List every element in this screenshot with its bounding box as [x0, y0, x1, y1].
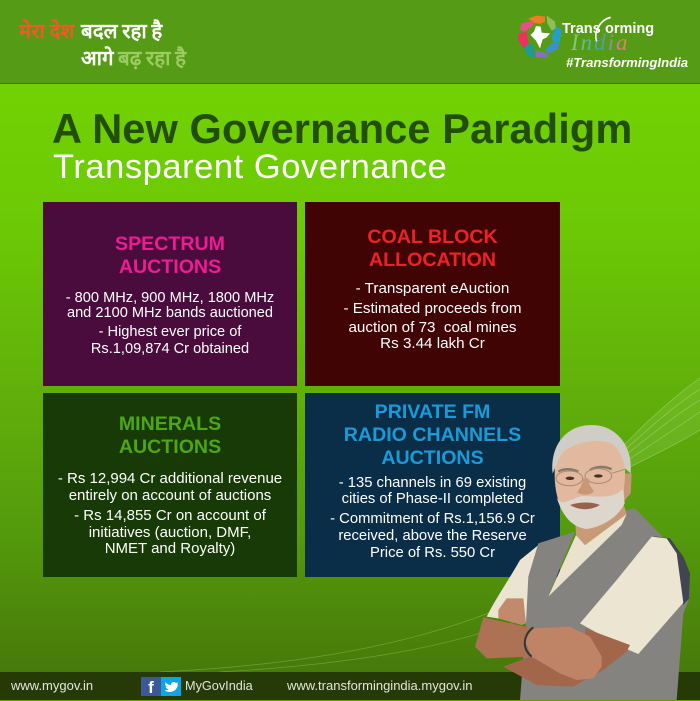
- panel: spectrum auctions: Rs.1,09,874 Cr obtained: [91, 341, 249, 357]
- panel: private fm radio channels auctions: - Commitment of Rs.1,156.9 Cr: [330, 511, 535, 527]
- panel: minerals auctions: entirely on account of auctions: [69, 487, 271, 504]
- icon: facebook: [141, 677, 161, 696]
- subtitle: Transparent Governance: [53, 148, 447, 186]
- panel: private fm radio channels auctions: Price of Rs. 550 Cr: [370, 545, 495, 561]
- transforming india logo: [518, 16, 688, 70]
- ear: [622, 473, 632, 502]
- logo hashtag: #TransformingIndia: [566, 55, 688, 70]
- hair: [552, 425, 631, 473]
- panel: minerals auctions: MINERALS: [119, 413, 221, 435]
- background swoosh lines: [160, 378, 700, 672]
- panel: coal block allocation: auction of 73 coal mines: [348, 319, 516, 336]
- hand highlight: [525, 627, 602, 680]
- illustration: man with crossed arms: [475, 425, 690, 700]
- hindi slogan: बढ़ रहा है: [118, 41, 186, 71]
- logo text: Trans: [562, 21, 601, 37]
- header band: [0, 0, 700, 84]
- panel: coal block allocation: [305, 202, 560, 386]
- hindi slogan: बदल रहा है: [81, 14, 162, 44]
- panel: spectrum auctions: - Highest ever price of: [99, 324, 241, 340]
- panel: coal block allocation: - Transparent eAuction: [356, 280, 509, 297]
- right sleeve: [580, 537, 683, 654]
- panel: private fm radio channels auctions: AUCTIONS: [381, 447, 484, 469]
- panel: coal block allocation: Rs 3.44 lakh Cr: [380, 335, 485, 352]
- panel: private fm radio channels auctions: PRIVATE FM: [375, 401, 490, 423]
- panel: minerals auctions: [43, 393, 297, 577]
- panel: private fm radio channels auctions: cities of Phase-II completed: [342, 491, 523, 507]
- panel: spectrum auctions: [43, 202, 297, 386]
- eyebrows: [558, 467, 612, 472]
- panel: minerals auctions: initiatives (auction, DMF,: [89, 524, 251, 541]
- panel: minerals auctions: AUCTIONS: [119, 436, 221, 458]
- mouth: [570, 502, 600, 509]
- left sleeve: [487, 542, 543, 623]
- wrist band: [525, 627, 533, 657]
- panel: private fm radio channels auctions: RADIO CHANNELS: [344, 424, 521, 446]
- logo wheel icon: [518, 16, 611, 58]
- panel: private fm radio channels auctions: - 135 channels in 69 existing: [339, 475, 526, 491]
- lower arm: [503, 628, 630, 687]
- beard: [557, 488, 625, 529]
- panel: minerals auctions: - Rs 12,994 Cr additional revenue: [58, 470, 282, 487]
- panel: coal block allocation: ALLOCATION: [369, 249, 496, 271]
- panel: private fm radio channels auctions: received, above the Reserve: [338, 528, 527, 544]
- footer band: [0, 672, 700, 700]
- upper arm and hand: [475, 617, 602, 680]
- panel: minerals auctions: NMET and Royalty): [105, 540, 235, 557]
- logo text second part: orming: [605, 21, 654, 37]
- panel: spectrum auctions: and 2100 MHz bands auctioned: [67, 305, 273, 321]
- panel: spectrum auctions: AUCTIONS: [119, 256, 221, 278]
- left fingers: [498, 598, 526, 625]
- panel: spectrum auctions: SPECTRUM: [115, 233, 225, 255]
- nose shadow: [577, 478, 594, 495]
- vest: [520, 508, 690, 700]
- title: A New Governance Paradigm: [52, 105, 632, 152]
- panel: private fm radio channels auctions: [305, 393, 560, 577]
- footer website transformingindia: www.transformingindia.mygov.in: [287, 678, 472, 693]
- hindi slogan: आगे: [81, 41, 114, 71]
- kurta collar: [548, 514, 627, 597]
- panel: coal block allocation: COAL BLOCK: [367, 226, 498, 248]
- glasses and eyes: [556, 469, 625, 486]
- panel: minerals auctions: - Rs 14,855 Cr on account of: [74, 507, 266, 524]
- vest armhole edge: [652, 536, 690, 605]
- panel: coal block allocation: - Estimated proceeds from: [343, 300, 522, 317]
- neck: [575, 503, 627, 545]
- footer website mygov: www.mygov.in: [11, 678, 93, 693]
- face: [555, 438, 625, 526]
- footer mygovindia handle: MyGovIndia: [185, 679, 253, 693]
- hindi slogan: मेरा देश: [19, 14, 74, 44]
- icon: twitter: [161, 677, 181, 696]
- panel: spectrum auctions: - 800 MHz, 900 MHz, 1800 MHz: [66, 290, 274, 306]
- hindi slogan: [18, 14, 187, 71]
